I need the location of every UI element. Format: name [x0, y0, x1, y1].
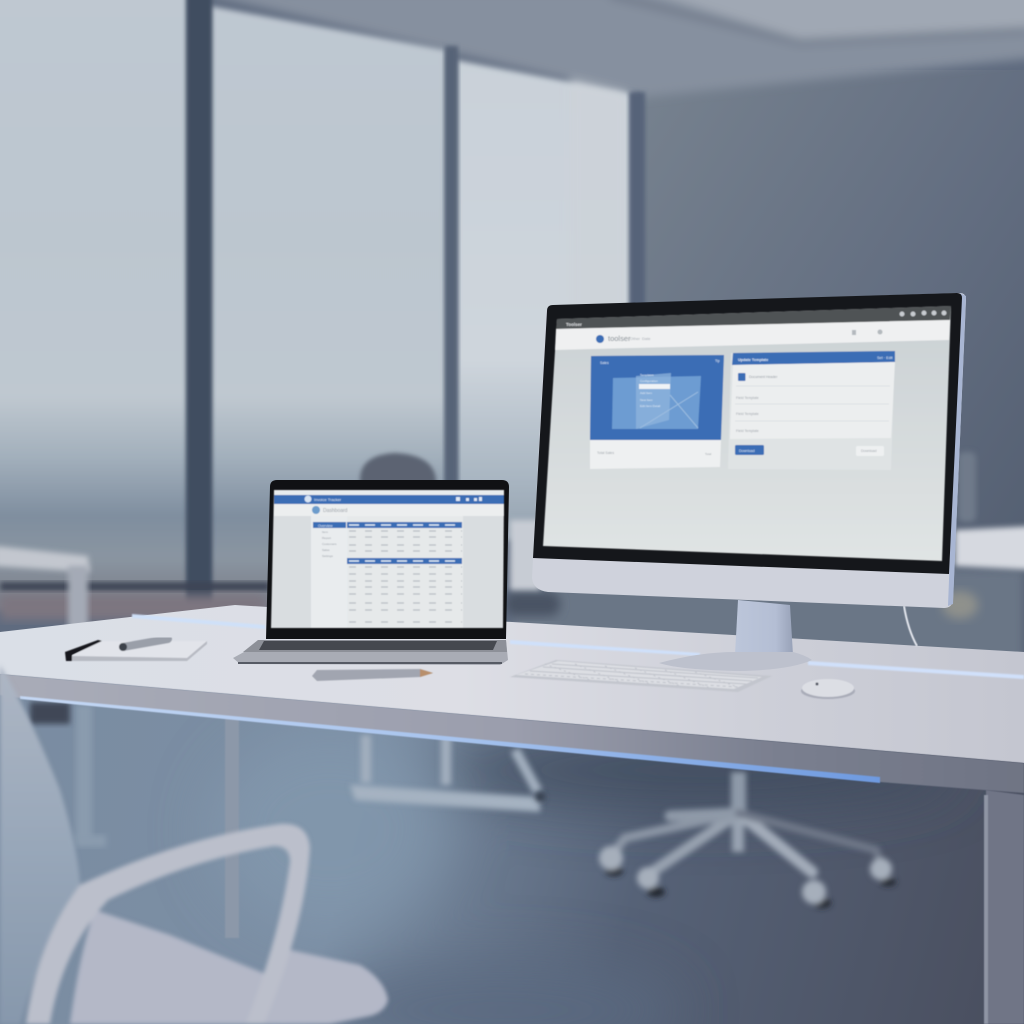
desk leg left: [225, 715, 239, 938]
window pane right: [456, 60, 632, 540]
band behind desk: [512, 560, 1024, 670]
laptop screen: Sales: [322, 548, 330, 552]
rear light strip right: [808, 661, 1024, 679]
window pane left: [0, 0, 190, 610]
secondary button: [856, 446, 884, 456]
monitor screen: New Item: [640, 398, 653, 402]
monitor screen: Edit Item Detail: [640, 404, 661, 408]
chair spokes: [614, 813, 881, 872]
laptop screen: Dashboard: [323, 508, 348, 514]
monitor screen: Templates: [640, 373, 654, 377]
monitor screen: toolser: [608, 334, 631, 343]
preview image: [612, 376, 701, 429]
floor base behind desk: [350, 785, 540, 812]
laptop lid: [266, 480, 509, 639]
chair wheel shadows: [605, 866, 896, 908]
monitor silver body: [532, 293, 966, 608]
warm object at right: [942, 591, 978, 619]
monitor screen: Add Item: [640, 391, 653, 395]
monitor screen: Tip: [715, 359, 720, 363]
lighter window section: [570, 78, 628, 520]
chair post: [731, 772, 746, 816]
ceiling: [190, 0, 1024, 97]
desk leg right: [984, 790, 1024, 1024]
monitor bezel: [533, 293, 962, 574]
floor shading: [210, 730, 960, 1024]
rear light strip left: [132, 614, 265, 629]
laptop screen: Overview: [318, 524, 333, 528]
pencil: [312, 669, 433, 681]
keyboard: [510, 660, 772, 692]
left leg distant: [76, 705, 92, 840]
monitor screen: [543, 306, 951, 561]
header strip: [555, 320, 950, 350]
monitor screen: Update Template: [738, 358, 768, 362]
monitor: [532, 293, 966, 608]
desk top surface: [0, 605, 1024, 763]
floor: [0, 660, 1024, 1024]
monitor screen: Date: [642, 336, 651, 341]
chair seat: [70, 910, 388, 1024]
window mullion: [445, 46, 458, 586]
monitor screen: Total: [705, 452, 712, 456]
desk chair base in background: [535, 772, 896, 908]
mouse: [801, 679, 855, 699]
window pane centre: [210, 6, 446, 610]
distant wheel: [535, 792, 545, 802]
monitor screen: Toolser: [566, 322, 582, 327]
monitor cable: [904, 606, 917, 646]
warm floor haze: [0, 595, 265, 620]
right table: [955, 526, 1024, 570]
form icon: [738, 373, 746, 381]
dark window sill: [0, 582, 270, 591]
back chair lower: [505, 592, 560, 616]
right wall: [640, 70, 1024, 670]
desk: [0, 605, 1024, 793]
monitor screen: Sales: [600, 361, 609, 365]
left table leg: [68, 566, 88, 636]
monitor screen: Download: [861, 449, 877, 453]
monitor stand: [659, 600, 812, 671]
top bar icons: [900, 310, 946, 316]
laptop sidebar: [311, 516, 347, 628]
laptop screen: Settings: [322, 554, 333, 558]
laptop screen: Invoice Tracker: [314, 497, 342, 502]
dark shadow: [30, 702, 70, 724]
monitor screen: Document Header: [749, 375, 778, 379]
monitor screen: Field Template: [736, 429, 759, 433]
back chair headrest: [360, 453, 436, 560]
laptop logo: [304, 496, 312, 502]
monitor screen: Field Template: [736, 412, 759, 416]
rear light strip centre: [510, 640, 700, 656]
monitor top bar: [556, 306, 951, 329]
left table: [0, 546, 90, 572]
desk front face: [0, 674, 1024, 793]
primary button: [735, 445, 764, 455]
monitor screen: Total Sales: [597, 451, 614, 455]
background furniture: [0, 452, 1024, 847]
foreground office chair: [0, 665, 388, 1024]
window column right: [629, 92, 645, 542]
centre table behind: [510, 520, 540, 590]
laptop base: [233, 640, 508, 665]
form card: [728, 351, 895, 470]
monitor screen: Field Template: [736, 396, 759, 400]
floor stand behind desk: [366, 735, 538, 792]
monitor screen: Configuration: [640, 379, 658, 383]
laptop screen: Report: [322, 536, 331, 540]
chair back: [0, 665, 80, 1024]
laptop: [233, 480, 509, 665]
right chair behind monitor: [958, 452, 976, 522]
laptop screen: Item: [322, 530, 328, 534]
window column: [186, 0, 212, 615]
monitor screen: Set · Edit: [877, 356, 894, 360]
laptop tables: [347, 516, 463, 628]
laptop screen: Customers: [322, 542, 337, 546]
chair wheels: [599, 846, 892, 904]
chair armrest: [26, 824, 310, 1024]
under-desk light strip: [20, 696, 880, 783]
monitor screen: Other: [630, 336, 641, 341]
monitor screen: Download: [739, 449, 755, 453]
preview card: [590, 355, 724, 440]
notebook and pen: [65, 639, 207, 661]
laptop screen: [271, 490, 504, 628]
